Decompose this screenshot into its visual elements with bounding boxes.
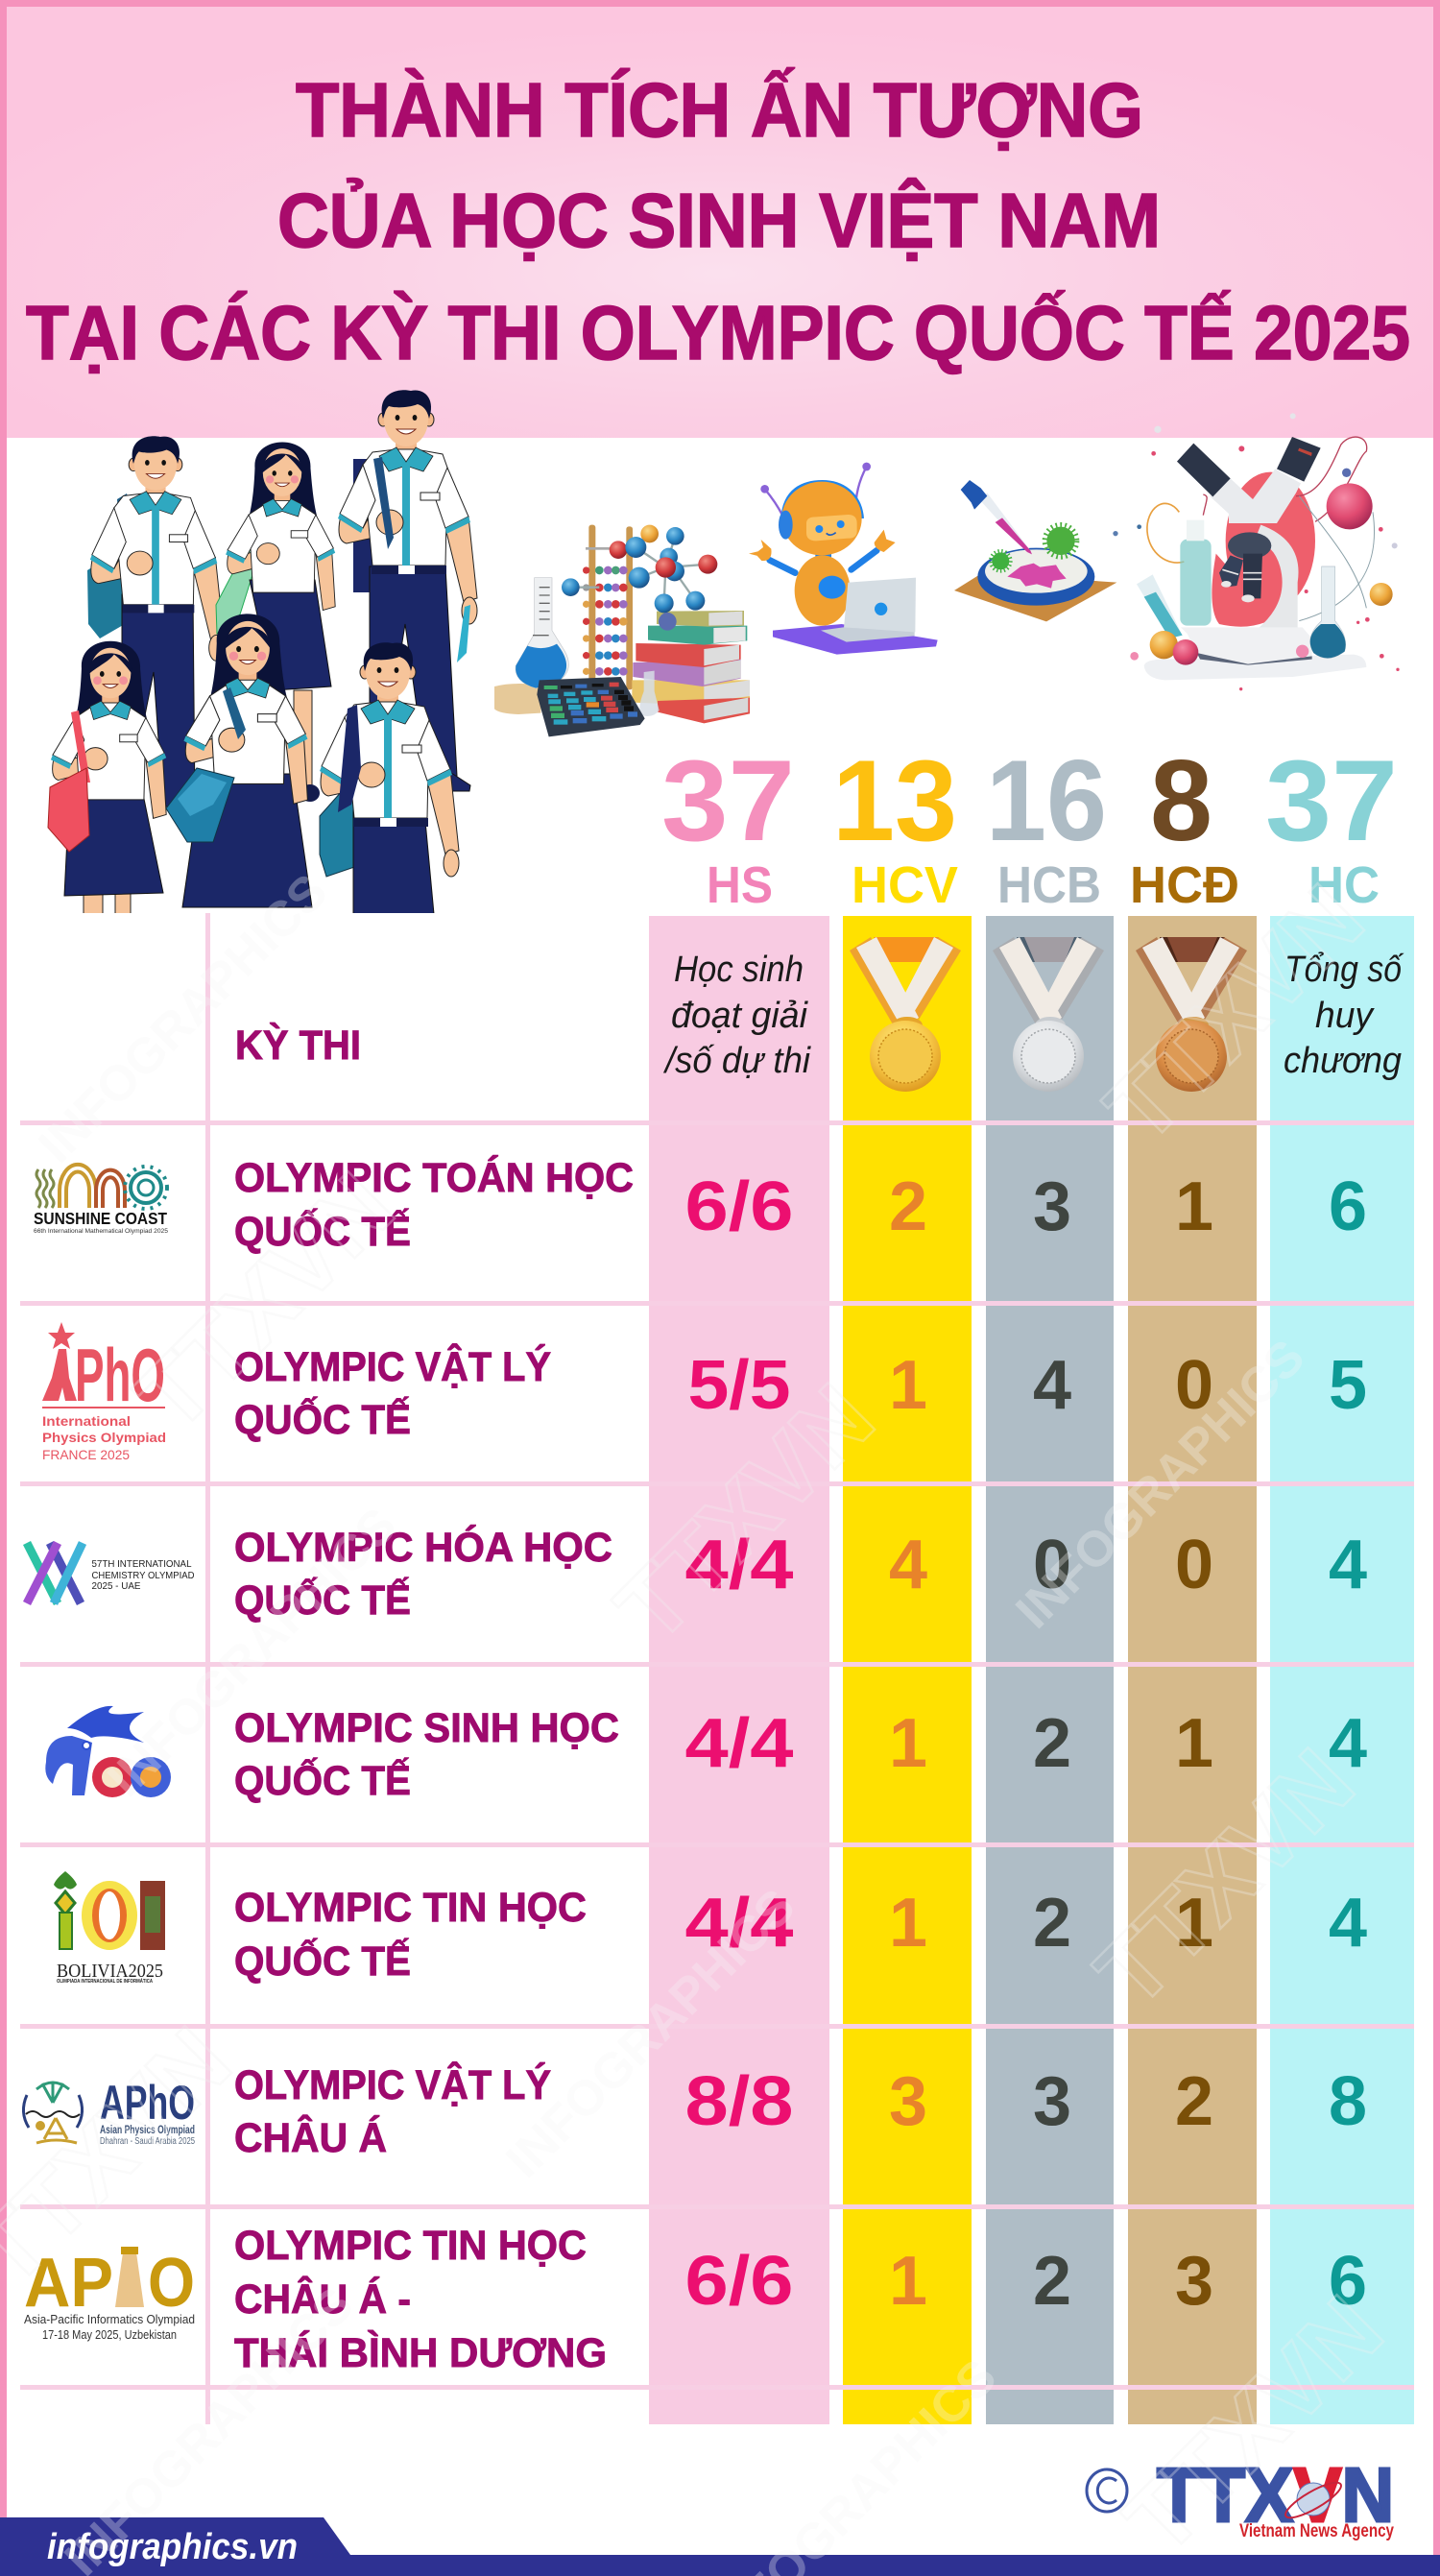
row 6 name [234,2061,551,2161]
molecule model [562,525,717,631]
summary figure: total medals: 37 [1265,736,1398,865]
row 5 name: QUỐC TẾ [234,1938,411,1985]
illustration: microscope [1113,413,1400,690]
values: gold medals [889,1168,927,2320]
row 2 name: OLYMPIC VẬT LÝ [234,1343,551,1390]
values: students awarded / participants: 4/4 [685,1885,793,1962]
summary figure: bronze medals: 8 [1150,736,1212,865]
column heading: students awarded per participants [662,950,811,1081]
objective lenses [1219,532,1271,602]
title [26,67,1410,375]
copyright symbol [1087,2469,1127,2512]
values: bronze medals: 1 [1175,1705,1213,1782]
watermark: TTXVN [1075,1728,1374,2027]
summary figure: total medals: HC [1308,856,1380,914]
illustration: math and chemistry objects [494,525,750,736]
row 3 name: QUỐC TẾ [234,1577,411,1624]
row 7 name: OLYMPIC TIN HỌC [234,2223,587,2269]
column: students [649,916,829,2424]
row 2 name [234,1343,551,1443]
summary figure: silver medals: HCB [997,856,1101,914]
logo: IMO Sunshine Coast: SUNSHINE COAST [34,1209,167,1228]
website label: infographics.vn [47,2527,298,2567]
values: total medals: 6 [1329,1168,1367,1245]
values: gold medals: 1 [889,1705,927,1782]
row 7 name: THÁI BÌNH DƯƠNG [234,2330,607,2376]
calculator [537,677,645,736]
summary figure: silver medals: 16 [986,736,1107,865]
row 5 name [234,1885,587,1985]
values: total medals: 4 [1329,1527,1367,1603]
row 3 name [234,1524,612,1624]
watermark: INFOGRAPHICS [496,1879,805,2188]
logo: IChO UAE [27,1543,195,1603]
title: THÀNH TÍCH ẤN TƯỢNG [296,67,1143,153]
values: bronze medals [1175,1168,1213,2320]
summary figure: students [661,736,795,914]
watermark: INFOGRAPHICS [29,864,338,1173]
logo: IChO UAE: 2025 - UAE [92,1580,140,1592]
header band [7,7,1433,438]
spheres and flask [1113,413,1400,690]
values: silver medals: 3 [1033,1168,1071,1245]
logo: IBO [45,1706,171,1797]
values: silver medals: 2 [1033,2243,1071,2320]
row 4 name: QUỐC TẾ [234,1757,411,1804]
row 5 name: OLYMPIC TIN HỌC [234,1885,587,1931]
values: silver medals: 4 [1033,1347,1071,1424]
logo: IOI Bolivia: BOLIVIA2025 [57,1961,163,1982]
values: silver medals: 3 [1033,2063,1071,2140]
illustration: robot with laptop [749,463,938,655]
column: bronze [1128,916,1257,2424]
dropper [961,480,1032,554]
values: gold medals: 4 [889,1527,927,1603]
student: front right boy [320,642,459,914]
watermark [0,864,1403,2576]
logo: APhO Saudi Arabia: Asian Physics Olympiad [100,2123,195,2136]
logo: APIO Uzbekistan: O [148,2245,195,2322]
row 2 name: QUỐC TẾ [234,1396,411,1443]
green virus small [991,551,1010,570]
values: students awarded / participants: 6/6 [685,2243,793,2320]
values: silver medals: 2 [1033,1705,1071,1782]
values: bronze medals: 3 [1175,2243,1213,2320]
values: bronze medals: 1 [1175,1168,1213,1245]
watermark: TTXVN [115,1152,414,1451]
summary figure: bronze medals: HCĐ [1130,856,1239,914]
logo: IChO UAE: CHEMISTRY OLYMPIAD [92,1570,195,1581]
values: gold medals: 2 [889,1168,927,1245]
row 3 name: OLYMPIC HÓA HỌC [234,1524,612,1571]
wooden block [494,684,540,714]
icon: bronze medal [1136,937,1247,1092]
column: gold [843,916,972,2424]
summary figure: gold medals: HCV [852,856,958,914]
values: gold medals: 1 [889,1885,927,1962]
student: front left girl [48,641,166,914]
values: total medals: 4 [1329,1885,1367,1962]
column heading: total medals: huy [1315,996,1375,1036]
illustration: group of students [48,390,477,914]
column heading: total medals: chương [1284,1041,1402,1081]
title: CỦA HỌC SINH VIỆT NAM [277,178,1161,263]
illustration: petri dish [954,480,1116,621]
values: bronze medals: 2 [1175,2063,1213,2140]
summary figure: silver medals [986,736,1107,914]
column heading: competition: KỲ THI [235,1023,361,1069]
row 1 name: QUỐC TẾ [234,1208,411,1255]
watermark: TTXVN [595,1363,894,1662]
values: gold medals: 1 [889,1347,927,1424]
values: bronze medals: 0 [1175,1347,1213,1424]
row 7 name [234,2223,607,2376]
watermark: INFOGRAPHICS [98,1498,407,1807]
logo: APIO Uzbekistan [24,2245,195,2342]
values: students awarded / participants [685,1168,793,2320]
logo: APhO Saudi Arabia [23,2076,195,2147]
summary figure: gold medals: 13 [832,736,957,865]
TTXVN logo: Vietnam News Agency [1239,2521,1394,2541]
abacus [583,525,633,689]
stack of books [632,611,750,723]
values: students awarded / participants: 6/6 [685,1168,793,1245]
values: bronze medals: 0 [1175,1527,1213,1603]
column: total [1270,916,1414,2424]
logo: IPhO France: FRANCE 2025 [42,1447,130,1462]
watermark: TTXVN [1085,864,1383,1163]
logo: APhO Saudi Arabia: APhO [100,2076,195,2130]
test tubes [1137,520,1212,638]
column heading: students awarded per participants: /số dự thi [662,1041,811,1081]
values: silver medals: 2 [1033,1885,1071,1962]
watermark: INFOGRAPHICS [1006,1330,1315,1639]
row 4 name [234,1705,619,1804]
logo: IOI Bolivia: OLIMPIADA INTERNACIONAL DE INFORMÁTICA [57,1978,153,1985]
red swirl [1212,472,1315,627]
values: students awarded / participants: 8/8 [685,2063,793,2140]
summary figure: students: 37 [661,736,795,865]
column: silver [986,916,1114,2424]
values: students awarded / participants: 4/4 [685,1527,793,1603]
logo: IMO Sunshine Coast [34,1165,169,1235]
values: total medals: 6 [1329,2243,1367,2320]
logo: IMO Sunshine Coast: 66th International Mathematical Olympiad 2025 [34,1229,169,1235]
logo: IPhO France: PhO [75,1333,165,1417]
values: students awarded / participants: 4/4 [685,1705,793,1782]
row 1 name: OLYMPIC TOÁN HỌC [234,1155,634,1201]
student: back right boy [338,390,477,791]
summary figure: bronze medals [1130,736,1239,914]
logo: APIO Uzbekistan: 17-18 May 2025, Uzbekistan [42,2327,177,2342]
row 6 name: CHÂU Á [234,2114,387,2161]
values: total medals: 8 [1329,2063,1367,2140]
logo: IPhO France: International [42,1413,131,1429]
watermark: TTXVN [1104,2275,1403,2574]
student: front middle girl [166,614,312,907]
column heading: students awarded per participants: đoạt giải [671,996,809,1036]
logo: IPhO France: Physics Olympiad [42,1430,166,1445]
values: gold medals: 3 [889,2063,927,2140]
column heading: students awarded per participants: Học sinh [674,950,804,990]
row 4 name: OLYMPIC SINH HỌC [234,1705,619,1751]
row 6 name: OLYMPIC VẬT LÝ [234,2061,551,2108]
microscope arm [1255,525,1299,629]
logo: APIO Uzbekistan: Asia-Pacific Informatics Olympiad [24,2312,195,2326]
logo: IOI Bolivia [54,1871,165,1985]
flask [516,578,568,688]
logo: APIO Uzbekistan: AP [24,2245,113,2322]
values: total medals: 4 [1329,1705,1367,1782]
logo: APhO Saudi Arabia: Dhahran - Saudi Arabia 2025 [100,2136,195,2147]
column heading: total medals [1284,950,1404,1081]
student: back left boy [87,436,224,807]
column heading: total medals: Tổng số [1284,950,1404,990]
logo: IChO UAE: 57TH INTERNATIONAL [92,1558,192,1570]
values: total medals [1329,1168,1367,2320]
footer bar [0,2517,1440,2576]
values: bronze medals: 1 [1175,1885,1213,1962]
values: students awarded / participants: 5/5 [687,1347,791,1424]
student: back middle girl [216,442,335,802]
TTXVN logo: TTXVN [1157,2452,1394,2538]
values: total medals: 5 [1329,1347,1367,1424]
row 7 name: CHÂU Á - [234,2275,411,2323]
values: silver medals: 0 [1033,1527,1071,1603]
values: gold medals: 1 [889,2243,927,2320]
values: silver medals [1033,1168,1071,2320]
row 1 name [234,1155,634,1255]
icon: gold medal [850,937,961,1092]
logo: IPhO France [42,1322,166,1462]
summary figure: students: HS [707,856,773,914]
small flask [639,671,660,716]
green virus large [1045,525,1076,556]
icon: silver medal [993,937,1104,1092]
